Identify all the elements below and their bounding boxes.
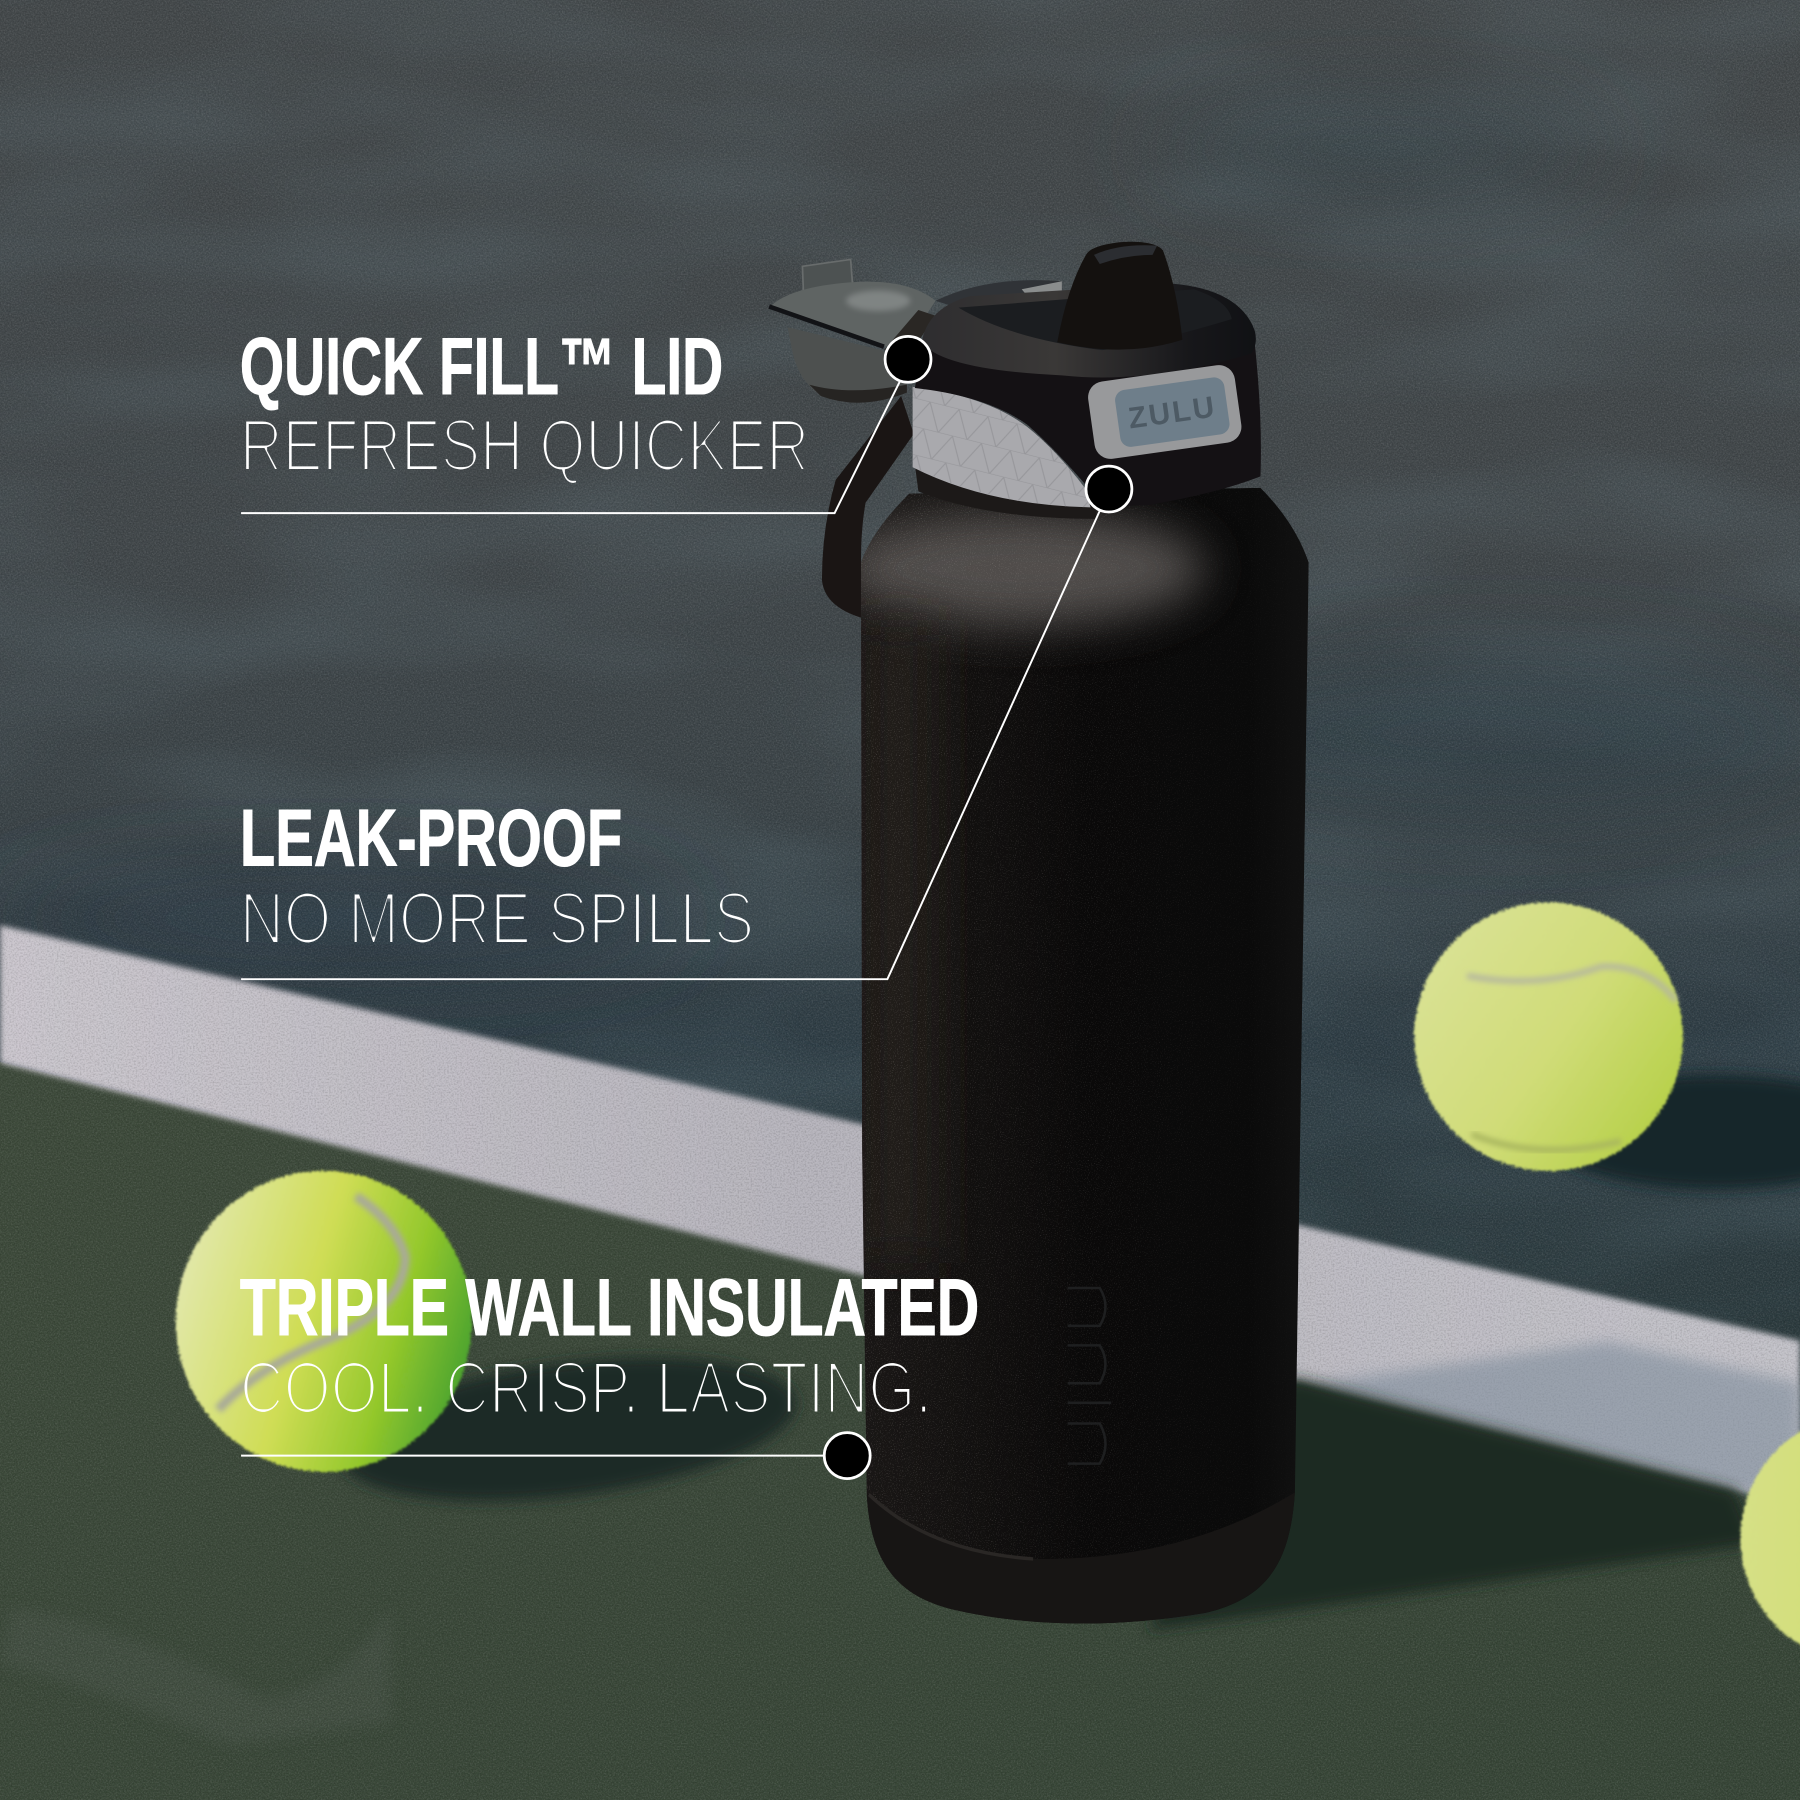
callout: quick fill lid (240, 322, 931, 513)
shadow: bottle (1148, 1378, 1756, 1630)
marker dot (1086, 466, 1132, 512)
lid top ring (922, 284, 1256, 377)
shoulder highlight (838, 511, 1205, 626)
subheading: NO MORE SPILLS (240, 877, 754, 960)
shadow: left ball (340, 1350, 802, 1509)
base band (867, 1492, 1295, 1642)
lid inner (959, 289, 1232, 350)
subheading: REFRESH QUICKER (240, 404, 809, 487)
left side sheen (859, 620, 939, 1263)
bottle body (838, 482, 1320, 1642)
ZULU button (1086, 363, 1244, 461)
leader line (241, 379, 901, 513)
spout (1057, 242, 1182, 350)
shadow on court line (1309, 1342, 1800, 1506)
tennis ball: left (176, 1171, 472, 1472)
bottle handle (822, 396, 914, 618)
lid collar (915, 333, 1261, 507)
leader line (241, 511, 1100, 979)
tennis ball: corner (1740, 1413, 1800, 1663)
marker dot (824, 1433, 870, 1479)
shadow: right ball (1538, 1074, 1800, 1189)
ZULU button: ZULU (1126, 390, 1219, 435)
leader line (241, 1455, 824, 1457)
tennis ball: right (1414, 902, 1683, 1171)
subheading: COOL. CRISP. LASTING. (240, 1346, 932, 1429)
bottle (769, 242, 1320, 1642)
grip band (913, 387, 1091, 507)
callout: triple wall insulated (240, 1263, 979, 1479)
heading: LEAK-PROOF (240, 794, 622, 884)
heading: TRIPLE WALL INSULATED (240, 1263, 979, 1353)
embossed logo (1068, 1288, 1111, 1464)
flip cap (769, 259, 1062, 403)
speckle texture (849, 482, 1320, 1642)
marker dot (885, 336, 931, 382)
callout: leak-proof (240, 466, 1132, 979)
heading: QUICK FILL™ LID (240, 322, 723, 412)
seal ring (915, 465, 1096, 519)
